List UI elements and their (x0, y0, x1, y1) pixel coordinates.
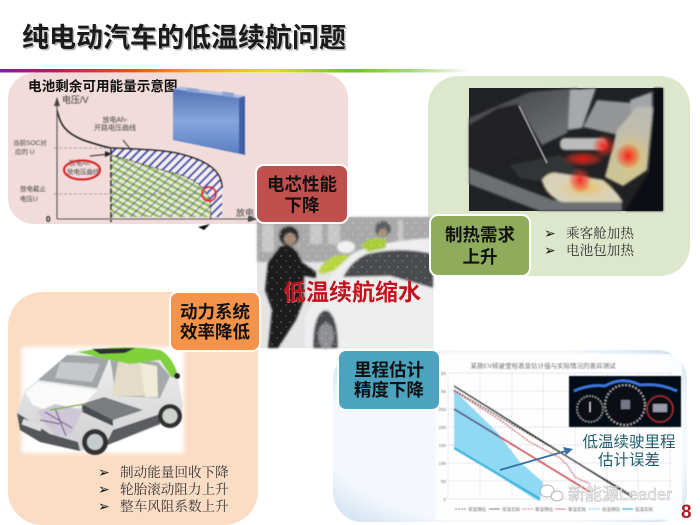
list: heating loads: ➢ (544, 243, 556, 259)
arrow: estimation error (500, 447, 573, 470)
discharge energy chart: 放电 (236, 207, 254, 218)
discharge energy chart: 0 (46, 215, 51, 224)
panel: range estimation (333, 350, 687, 522)
list: drivetrain effects (98, 464, 229, 515)
callout: cell performance: 电芯性能 (267, 174, 337, 194)
chart legend: 寒温预估 (535, 506, 553, 513)
callout: range estimation (338, 350, 440, 410)
chart legend: 常温预估 (468, 506, 486, 513)
line chart: estimated vs actual range: 0 (443, 497, 446, 502)
list: drivetrain effects: ➢ (98, 465, 110, 481)
list: drivetrain effects: ➢ (98, 482, 110, 498)
headline over photo: 低温续航缩水 (283, 279, 421, 305)
callout: cell performance (256, 165, 348, 223)
chart annotation (582, 433, 676, 469)
callout: range estimation: 里程估计 (354, 360, 424, 380)
list: heating loads: 电池包加热 (566, 242, 634, 258)
list: drivetrain effects: 制动能量回收下降 (120, 464, 229, 480)
line chart: estimated vs actual range: 150 (438, 443, 446, 448)
discharge energy chart: 电压U (20, 194, 38, 203)
watermark: 新能源Leader (568, 485, 672, 504)
list: drivetrain effects: 轮胎滚动阻力上升 (120, 481, 229, 497)
line chart: estimated vs actual range: 某款EV续驶里程表显估计值与实际情况的差异测试 (470, 361, 616, 370)
line chart: estimated vs actual range: 250 (438, 407, 446, 412)
list: heating loads (544, 225, 634, 259)
rainbow header rule (0, 69, 470, 72)
chart legend: 常温实际 (502, 506, 520, 513)
photo: heated car seat (469, 88, 663, 211)
image: instrument cluster (569, 376, 681, 427)
panel: heating demand (428, 76, 690, 276)
illustration: electric car cutaway (17, 347, 184, 455)
list: drivetrain effects: 整车风阻系数上升 (120, 498, 229, 514)
callout: drivetrain efficiency: 效率降低 (180, 322, 250, 342)
headline over photo: 低温续航缩水 (284, 280, 422, 306)
chart annotation: 低温续驶里程 (582, 433, 676, 451)
discharge energy chart: 当前SOC对 (13, 138, 47, 147)
callout: cell performance: 下降 (284, 196, 320, 216)
discharge energy chart: 电压/V (62, 94, 89, 105)
callout: heating demand (430, 215, 530, 276)
discharge energy chart: 应的 U (15, 147, 35, 156)
page number: 8 (681, 502, 692, 523)
panel: drivetrain efficiency (8, 292, 258, 525)
chart heading: 电池剩余可用能量示意图 (28, 78, 178, 94)
discharge energy chart (13, 94, 258, 230)
callout: range estimation: 精度下降 (354, 380, 424, 400)
chart legend: 低温预估 (602, 506, 620, 513)
line chart: estimated vs actual range: 100 (438, 461, 446, 466)
panel: battery energy diagram (8, 73, 348, 230)
callout: heating demand: 制热需求 (445, 225, 515, 245)
title: 纯电动汽车的低温续航问题 (24, 24, 348, 54)
list: heating loads: ➢ (544, 226, 556, 242)
line chart: estimated vs actual range: 200 (438, 425, 446, 430)
discharge energy chart: 放电Ah (69, 158, 90, 167)
chart legend: 低温实际 (635, 506, 653, 513)
list: heating loads: 乘客舱加热 (566, 225, 634, 241)
discharge energy chart: 放电压曲线 (67, 167, 100, 176)
line chart: estimated vs actual range: 50 (441, 479, 446, 484)
callout: drivetrain efficiency (170, 292, 260, 351)
title: 纯电动汽车的低温续航问题 (22, 23, 346, 53)
icon: battery cell (173, 87, 245, 155)
discharge energy chart: 放电Ah- (103, 115, 128, 124)
line chart: estimated vs actual range (436, 354, 682, 520)
line chart: estimated vs actual range: 300 (438, 389, 446, 394)
photo: pushing a car through snow (257, 217, 433, 349)
line chart: estimated vs actual range: 350 (438, 371, 446, 376)
callout: drivetrain efficiency: 动力系统 (180, 302, 250, 322)
list: drivetrain effects: ➢ (98, 499, 110, 515)
chart legend (455, 506, 653, 513)
discharge energy chart: 开路电压曲线 (94, 123, 136, 132)
chart legend: 寒温实际 (568, 506, 586, 513)
callout: heating demand: 上升 (462, 247, 498, 267)
discharge energy chart: 放电截止 (20, 184, 46, 193)
chart annotation: 估计误差 (598, 451, 660, 469)
